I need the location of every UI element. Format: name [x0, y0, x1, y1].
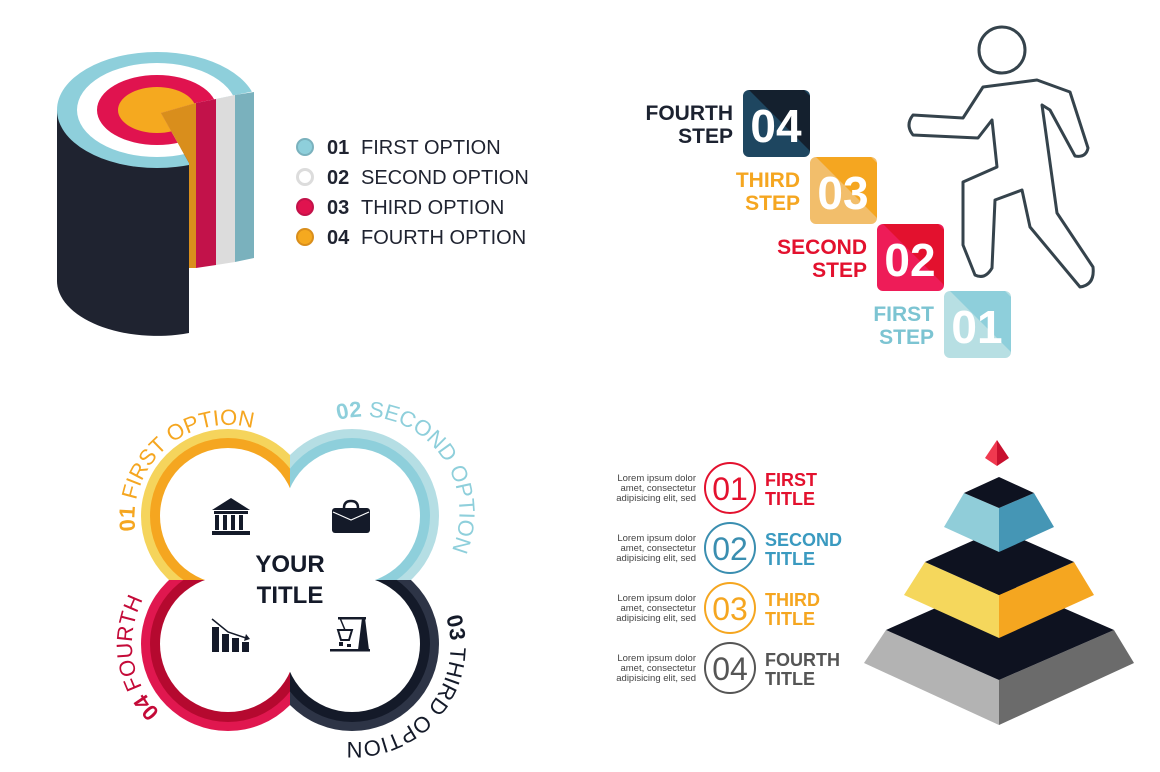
item 03: TITLE: [765, 609, 815, 629]
flower center: [160, 448, 420, 712]
cylinder body: [57, 110, 189, 336]
legend: cylinder options: FOURTH OPTION: [361, 227, 526, 249]
item 01: [616, 463, 817, 513]
step 04: FOURTH: [646, 102, 733, 125]
panel: pyramid: [864, 440, 1134, 725]
legend: cylinder options: SECOND OPTION: [361, 167, 529, 189]
item 02: amet, consectetur: [620, 543, 696, 554]
step 01: 01: [951, 301, 1003, 353]
item 02: adipisicing elit, sed: [616, 553, 696, 564]
step 01: STEP: [879, 326, 934, 349]
panel: flower diagram: TITLE: [257, 582, 323, 609]
item 01: adipisicing elit, sed: [616, 493, 696, 504]
legend: cylinder options: [297, 137, 529, 249]
panel: flower diagram: [116, 402, 475, 758]
item 02: [616, 523, 842, 573]
title: your title: YOUR: [255, 551, 325, 578]
icon: declining bar chart: [212, 619, 250, 652]
cylinder top rings: [57, 52, 257, 168]
step 02: 02: [884, 234, 936, 286]
icon: crane: [330, 617, 370, 652]
label: 04 fourth: 04 FOURTH: [116, 594, 158, 720]
step 03: [736, 157, 877, 224]
item 02: 02: [712, 531, 748, 567]
step 03: THIRD: [736, 169, 800, 192]
pyramid bottom tier: [864, 580, 1134, 725]
item 02: SECOND: [765, 530, 842, 550]
item 03: amet, consectetur: [620, 603, 696, 614]
step 03: 03: [817, 167, 869, 219]
cut face strips: [161, 92, 254, 268]
ring: first option (orange): [141, 429, 290, 580]
label: 02 second option: 02 SECOND OPTION: [336, 402, 475, 554]
step 04: STEP: [678, 125, 733, 148]
step 02: STEP: [812, 259, 867, 282]
ring: third option (dark): [290, 580, 439, 731]
item 02: Lorem ipsum dolor: [617, 533, 696, 544]
step 01: [873, 291, 1011, 358]
item 03: 03: [712, 591, 748, 627]
panel: cylinder chart: [57, 52, 257, 336]
label: 03 third option: 03 THIRD OPTION: [348, 615, 466, 758]
legend: cylinder options: 01: [327, 137, 349, 159]
ring: fourth option (red): [141, 580, 290, 731]
item 04: 04: [712, 651, 748, 687]
item 03: Lorem ipsum dolor: [617, 593, 696, 604]
step 02: [777, 224, 944, 291]
item 04: amet, consectetur: [620, 663, 696, 674]
legend: cylinder options: FIRST OPTION: [361, 137, 501, 159]
item 01: FIRST: [765, 470, 817, 490]
item 03: adipisicing elit, sed: [616, 613, 696, 624]
step 04: [646, 90, 810, 157]
item 04: Lorem ipsum dolor: [617, 653, 696, 664]
icon: briefcase: [332, 501, 370, 533]
step 03: STEP: [745, 192, 800, 215]
icon: walking person: [909, 27, 1093, 287]
item 01: amet, consectetur: [620, 483, 696, 494]
panel: steps: [646, 90, 1011, 358]
item 04: TITLE: [765, 669, 815, 689]
panel: numbered list: [616, 463, 842, 693]
item 04: FOURTH: [765, 650, 840, 670]
legend: cylinder options: 03: [327, 197, 349, 219]
item 03: [616, 583, 820, 633]
item 01: TITLE: [765, 489, 815, 509]
item 01: 01: [712, 471, 748, 507]
item 04: adipisicing elit, sed: [616, 673, 696, 684]
step 01: FIRST: [873, 303, 934, 326]
pyramid apex: [985, 440, 1009, 466]
item 04: [616, 643, 840, 693]
item 02: TITLE: [765, 549, 815, 569]
step 04: 04: [750, 100, 802, 152]
ring: second option (light blue): [290, 429, 439, 580]
legend: cylinder options: 02: [327, 167, 349, 189]
icon: bank: [212, 498, 250, 535]
item 01: Lorem ipsum dolor: [617, 473, 696, 484]
pyramid middle tier: [904, 529, 1094, 638]
pyramid top tier: [944, 477, 1054, 552]
step 02: SECOND: [777, 236, 867, 259]
legend: cylinder options: 04: [327, 227, 350, 249]
label: 01 first option: 01 FIRST OPTION: [119, 410, 254, 531]
item 03: THIRD: [765, 590, 820, 610]
legend: cylinder options: THIRD OPTION: [361, 197, 504, 219]
